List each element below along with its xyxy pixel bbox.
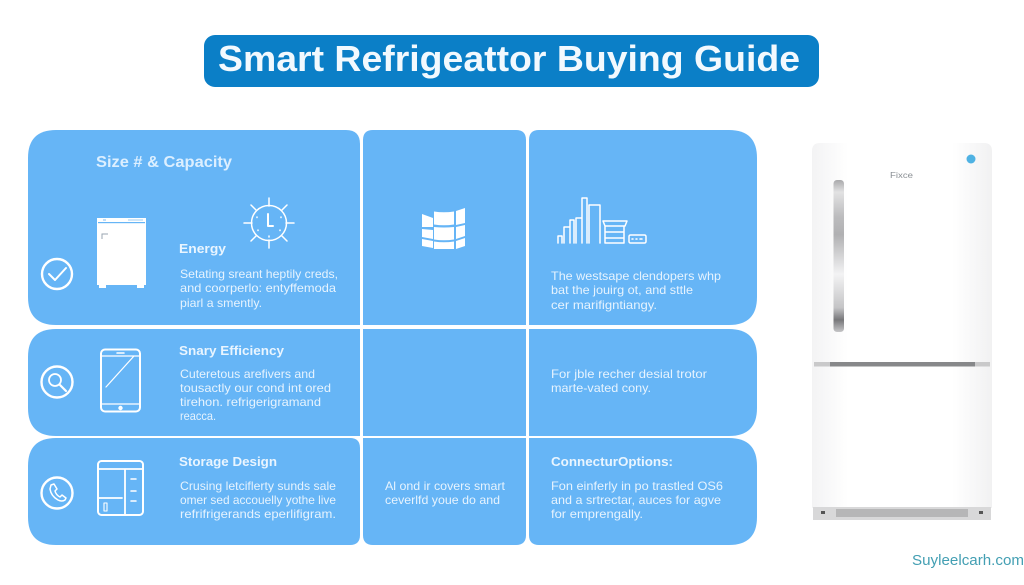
fridge door divider <box>814 362 990 366</box>
fridge handle <box>834 180 844 332</box>
text block: connector: for emprengally. <box>551 507 643 521</box>
text block: efficiency: tousactly our cond int ored <box>180 381 331 395</box>
text block: developers: The westsape clendopers whp <box>551 269 721 283</box>
fridge brand: Fixce <box>890 170 913 180</box>
icon: bar chart and boxes <box>558 198 646 243</box>
panel: size and capacity with energy <box>28 130 360 325</box>
text block: storage: Crusing letciflerty sunds sale <box>180 479 336 493</box>
icon: check circle <box>42 259 72 289</box>
heading: smart efficiency: Snary Efficiency <box>179 343 285 358</box>
icon: magnifier circle <box>42 366 72 398</box>
refrigerator illustration <box>812 143 992 520</box>
text block: efficiency: Cuteretous arefivers and <box>180 367 315 381</box>
text block: recher: For jble recher desial trotor <box>551 367 707 381</box>
text block: storage <box>180 479 336 521</box>
fridge status light <box>966 154 976 164</box>
icon: storage shelves <box>422 208 465 249</box>
panel: middle bottom <box>363 438 526 545</box>
text block: ai covers: Al ond ir covers smart <box>385 479 506 493</box>
text block: recher: marte-vated cony. <box>551 381 651 395</box>
text block: developers: bat the jouirg ot, and sttle <box>551 283 693 297</box>
icon: tablet <box>101 350 140 412</box>
text block: energy: Setating sreant heptily creds, <box>180 267 338 281</box>
panel: connector options <box>529 438 757 545</box>
text block: efficiency: reacca. <box>180 409 216 423</box>
text block: developers: cer marifigntiangy. <box>551 298 657 312</box>
panel: storage design <box>28 438 360 545</box>
text block: efficiency: tirehon. refrigerigramand <box>180 395 321 409</box>
text block: recher <box>551 367 707 395</box>
icon: fridge interior <box>98 461 143 515</box>
heading: connector options: ConnecturOptions: <box>551 454 673 469</box>
text block: energy <box>180 267 338 310</box>
text block: connector: Fon einferly in po trastled OS6 <box>551 479 723 493</box>
text block: connector <box>551 479 723 521</box>
heading: size and capacity: Size # & Capacity <box>96 154 232 171</box>
text block: storage: omer sed accouelly yothe live <box>180 493 336 507</box>
fridge base <box>813 507 991 520</box>
panel: right centre <box>529 329 757 436</box>
text block: efficiency <box>180 367 331 423</box>
text block: ai covers <box>385 479 506 507</box>
panel: middle top <box>363 130 526 325</box>
panel: smart efficiency <box>28 329 360 436</box>
text block: developers <box>551 269 721 312</box>
text block: energy: and coorperlo: entyffemoda <box>180 281 336 295</box>
icon: clock sun <box>244 198 294 248</box>
title banner: Smart Refrigeattor Buying Guide <box>218 38 800 79</box>
text block: connector: and a srtrectar, auces for agve <box>551 493 721 507</box>
text block: ai covers: ceverlfd youe do and <box>385 493 500 507</box>
icon: appliance <box>97 218 146 288</box>
panel: right top <box>529 130 757 325</box>
panel: middle centre <box>363 329 526 436</box>
text block: energy: piarl a smently. <box>180 296 262 310</box>
heading: storage design: Storage Design <box>179 454 277 469</box>
watermark: Suyleelcarh.com <box>912 553 1024 569</box>
text block: storage: refrifrigerands eperlifigram. <box>180 507 336 521</box>
heading: energy: Energy <box>179 241 227 256</box>
icon: phone circle <box>42 478 72 508</box>
